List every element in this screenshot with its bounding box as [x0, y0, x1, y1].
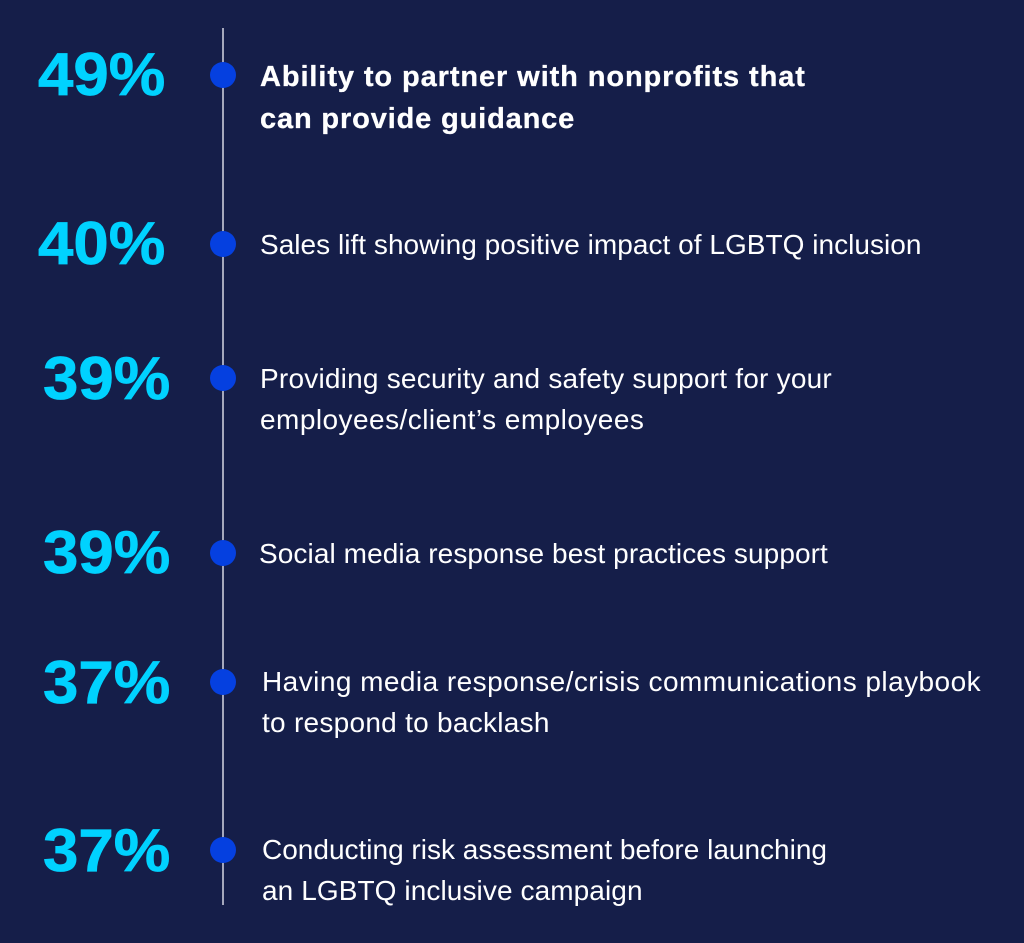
- marker 1: [210, 62, 236, 88]
- text 6: an LGBTQ inclusive campaign: [262, 875, 643, 906]
- text 5: [262, 666, 981, 738]
- percent 40: 40%: [38, 210, 165, 277]
- text 1: can provide guidance: [260, 103, 575, 135]
- text 1: Ability to partner with nonprofits that: [260, 61, 806, 93]
- text 3: Providing security and safety support for your: [260, 363, 832, 394]
- percent 39 second: 39%: [43, 519, 170, 586]
- text 6: Conducting risk assessment before launching: [262, 834, 827, 865]
- marker 3: [210, 365, 236, 391]
- text 3: employees/client’s employees: [260, 404, 644, 435]
- marker 4: [210, 540, 236, 566]
- text 6: [262, 834, 827, 906]
- text 2: Sales lift showing positive impact of LGBTQ inclusion: [260, 229, 921, 260]
- marker 2: [210, 231, 236, 257]
- text 5: Having media response/crisis communications playbook: [262, 666, 981, 697]
- marker 5: [210, 669, 236, 695]
- text 5: to respond to backlash: [262, 707, 550, 738]
- percent 37: 37%: [43, 649, 170, 716]
- text 4: Social media response best practices support: [259, 538, 828, 569]
- text 1: [260, 61, 806, 135]
- percent 49: 49%: [38, 41, 165, 108]
- percent 39: 39%: [43, 345, 170, 412]
- text 3: [260, 363, 832, 435]
- timeline line: [222, 28, 224, 905]
- marker 6: [210, 837, 236, 863]
- percent 37 second: 37%: [43, 817, 170, 884]
